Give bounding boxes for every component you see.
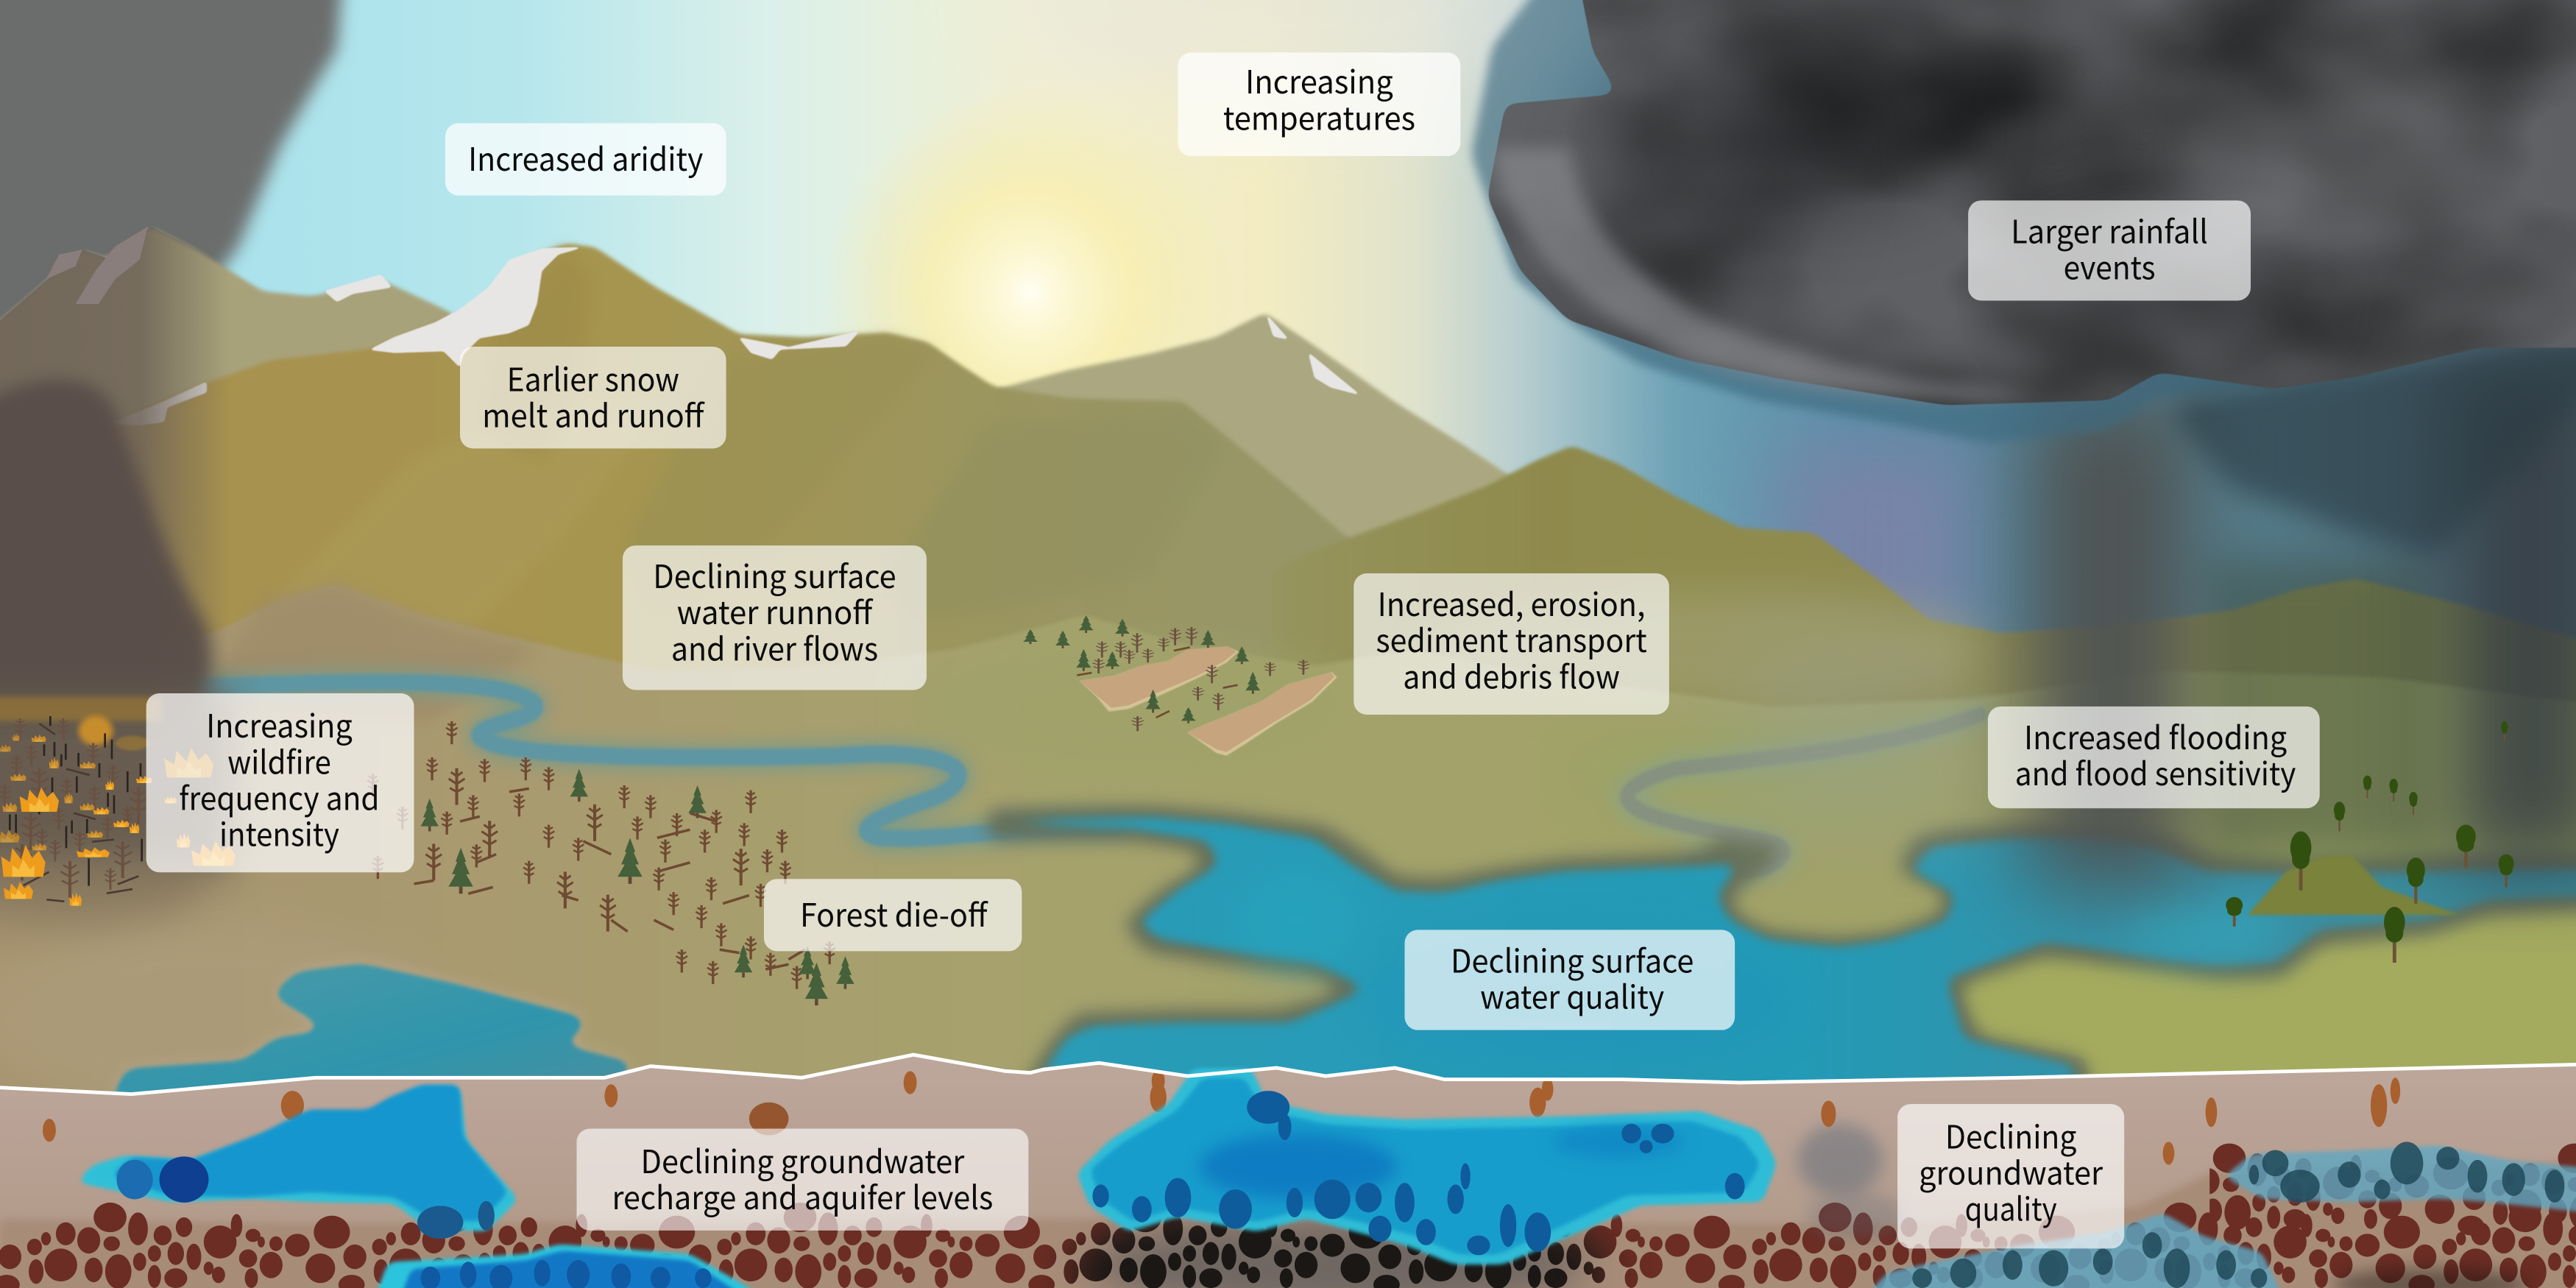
rock band base tone [0, 1163, 2576, 1288]
smoke veil over left mountains [0, 227, 230, 739]
flooded trees and mound [2226, 721, 2514, 963]
label: groundwater quality [1897, 1104, 2124, 1248]
green floodplain [1956, 897, 2576, 1084]
label: increased flooding: Increased flooding [2024, 712, 2287, 759]
aquifer: lower left [368, 1244, 797, 1288]
label: increased aridity: Increased aridity [468, 134, 704, 180]
subsurface soil [0, 1055, 2576, 1288]
label: larger rainfall events: events [2064, 242, 2156, 289]
sky background [0, 0, 2576, 723]
river: right stream [1627, 715, 1980, 871]
wildfire smoke: upper grey plume [0, 0, 345, 427]
label: groundwater recharge [576, 1128, 1028, 1231]
label: erosion and sediment: sediment transport [1376, 615, 1647, 662]
mountain-top streaks [46, 227, 148, 304]
label: earlier snow melt and runoff [460, 347, 726, 448]
lavender rain haze over distant sky [1774, 436, 1980, 682]
label: increasing temperatures: Increasing [1245, 57, 1393, 103]
label: earlier snow melt and runoff: melt and runoff [482, 390, 705, 436]
label: declining surface water runoff: water runnoff [677, 587, 874, 634]
burning forest [0, 696, 236, 906]
smoke-dimmed flame band [0, 696, 162, 751]
valley ground [0, 583, 2576, 1117]
ground surface line [0, 1055, 2576, 1094]
rock layer [0, 1144, 2576, 1288]
label: groundwater quality: groundwater [1919, 1147, 2103, 1194]
label: erosion and sediment [1354, 573, 1669, 715]
aquifer: right contaminated [2223, 1142, 2576, 1216]
right green hill [1084, 445, 2576, 887]
label: declining surface water quality: Declining surface [1451, 935, 1694, 982]
rain shafts [1741, 361, 2576, 887]
blackened rocks under stain [1048, 1217, 1630, 1288]
sun [825, 87, 1236, 498]
label: increasing wildfire: frequency and [179, 773, 380, 819]
label: groundwater recharge: recharge and aquifer levels [612, 1172, 993, 1219]
storm cloud [1471, 0, 2576, 559]
label: groundwater quality: Declining [1945, 1111, 2076, 1158]
label: increasing wildfire: wildfire [227, 737, 331, 783]
label: groundwater recharge: Declining groundwater [641, 1136, 964, 1183]
soil pebbles [43, 1069, 2400, 1165]
hillside dead trees [1077, 627, 1309, 731]
front mountain range [0, 243, 1429, 707]
label: increased aridity [445, 123, 726, 196]
label: declining surface water quality: water quality [1480, 972, 1664, 1019]
label: increased flooding: and flood sensitivity [2015, 749, 2296, 795]
main floodwater [986, 805, 2576, 1097]
aquifer: central [1076, 1068, 1777, 1265]
soil stains [1092, 1124, 2530, 1288]
label: forest die-off [764, 879, 1022, 951]
label: increasing wildfire: intensity [219, 810, 339, 856]
label: declining surface water runoff: and river flows [671, 623, 878, 670]
label: declining surface water quality [1404, 930, 1735, 1030]
erosion scars [1080, 646, 1337, 756]
back left mountain [0, 227, 493, 690]
label: larger rainfall events [1968, 200, 2251, 300]
label: groundwater quality: quality [1965, 1183, 2057, 1230]
label: increasing temperatures [1178, 52, 1460, 156]
label: declining surface water runoff: Declining surface [653, 551, 896, 598]
snow patches [108, 247, 1362, 425]
river: left stream [181, 682, 1117, 838]
label: larger rainfall events: Larger rainfall [2011, 206, 2208, 252]
wildfire smoke: dark lower plume [0, 380, 210, 731]
left lake [108, 963, 637, 1104]
charred trees [0, 716, 148, 902]
label: forest die-off: Forest die-off [800, 890, 988, 936]
label: increased flooding [1988, 707, 2320, 808]
label: earlier snow melt and runoff: Earlier snow [507, 354, 679, 400]
forest die-off: dead trees [367, 721, 835, 989]
aquifer: left [76, 1084, 519, 1239]
label: erosion and sediment: Increased, erosion, [1378, 579, 1645, 626]
label: declining surface water runoff [623, 545, 927, 690]
far right mountain [986, 312, 1536, 690]
label: increasing temperatures: temperatures [1223, 93, 1415, 139]
label: increasing wildfire: Increasing [206, 701, 353, 747]
flames [0, 733, 236, 906]
hillside pines [1023, 615, 1260, 723]
hillside forest and erosion scars [1023, 615, 1337, 756]
label: erosion and sediment: and debris flow [1403, 651, 1620, 698]
aquifer: lower right contaminated [1848, 1212, 2292, 1288]
label: increasing wildfire [146, 693, 414, 872]
forest die-off: surviving pines [420, 769, 854, 1005]
fire-scorched ground [0, 690, 230, 923]
